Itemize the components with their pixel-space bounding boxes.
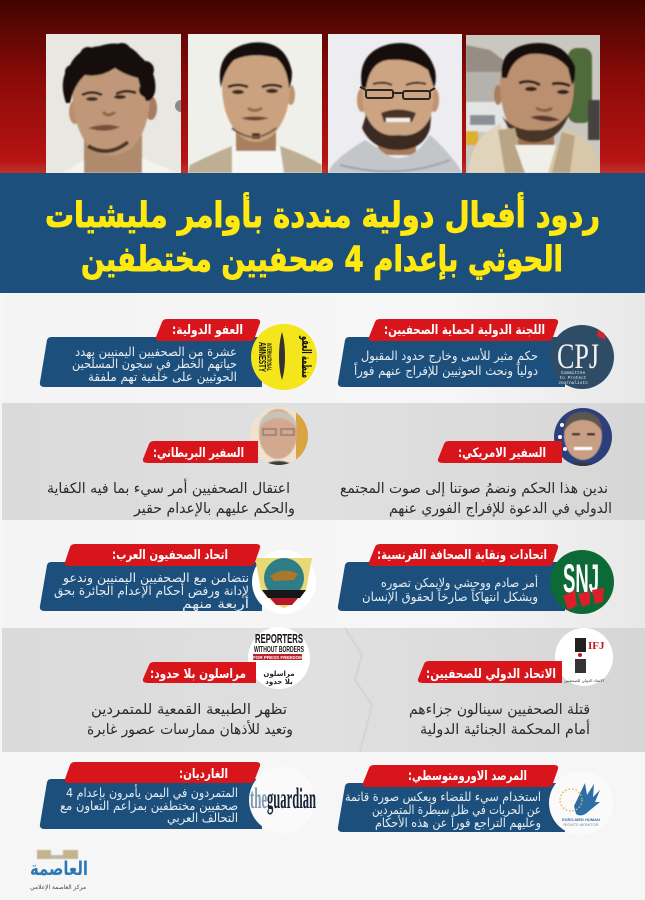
red header background bbox=[0, 0, 645, 175]
Guardian logo: the bbox=[250, 782, 267, 815]
RSF logo: REPORTERS bbox=[255, 631, 303, 646]
panel: The Guardian: الغارديان: bbox=[179, 767, 228, 782]
panel: US ambassador: السفير الامريكي: bbox=[458, 446, 546, 461]
panel: British ambassador: والحكم عليهم بالإعدام حقير bbox=[133, 501, 295, 517]
panel: CPJ bbox=[338, 319, 614, 389]
panel: CPJ: اللجنة الدولية لحماية الصحفيين: bbox=[384, 323, 545, 338]
Euro-Med logo bbox=[549, 771, 613, 835]
panel: US ambassador: الدولي في الدعوة للإفراج الفوري عنهم bbox=[389, 501, 612, 518]
title text bbox=[45, 192, 600, 280]
CPJ logo: to Protect bbox=[559, 375, 587, 381]
panel: Arab Journalists Union: نتضامن مع الصحفيين اليمنيين وندعو bbox=[62, 570, 249, 586]
panel: British ambassador: اعتقال الصحفيين أمر سيء بما فيه الكفاية bbox=[47, 478, 290, 497]
photo: journalist 2 bbox=[188, 34, 322, 173]
panel: French press unions: اتحادات ونقابة الصحافة الفرنسية: bbox=[377, 548, 547, 563]
panel: Arab Journalists Union: اتحاد الصحفيون العرب: bbox=[112, 548, 228, 563]
title text: الحوثي بإعدام 4 صحفيين مختطفين bbox=[81, 240, 563, 280]
RSF logo: FOR PRESS FREEDOM bbox=[253, 655, 303, 660]
panel: RSF: وتعيد للأذهان ممارسات عصور غابرة bbox=[87, 720, 293, 738]
RSF logo: WITHOUT BORDERS bbox=[254, 645, 304, 654]
IFJ logo: IFJ bbox=[588, 640, 605, 652]
photo: journalist 4 bbox=[466, 35, 600, 173]
panel: Arab Journalists Union bbox=[40, 544, 316, 614]
RSF logo: مراسلون bbox=[263, 670, 295, 678]
footer logo: مركز العاصمة الإعلامي bbox=[30, 884, 86, 891]
RSF logo bbox=[248, 627, 310, 689]
photo: journalist 1 bbox=[46, 34, 187, 173]
panel: Euro-Med monitor: استخدام سيء للقضاء ويعكس صورة قاتمة bbox=[345, 789, 541, 805]
panel: Amnesty: عشرة من الصحفيين اليمنيين يهدد bbox=[75, 344, 237, 360]
title banner bbox=[0, 173, 645, 293]
Euro-Med logo: RIGHTS MONITOR bbox=[563, 822, 599, 827]
panel: Amnesty bbox=[40, 319, 317, 390]
Amnesty logo bbox=[251, 324, 317, 390]
panel: French press unions bbox=[338, 544, 614, 614]
Amnesty logo: منظمة العفو bbox=[298, 335, 313, 378]
Arab journalists logo bbox=[252, 550, 316, 614]
panel: Euro-Med monitor: وعليهم التراجع فوراً عن هذه الأحكام bbox=[375, 813, 541, 831]
panel: IFJ: أمام المحكمة الجنائية الدولية bbox=[420, 719, 590, 738]
panel: British ambassador bbox=[47, 407, 308, 517]
CPJ logo: Journalists bbox=[558, 380, 588, 386]
panel: RSF bbox=[87, 627, 310, 738]
panel: IFJ: قتلة الصحفيين سينالون جزاءهم bbox=[409, 702, 590, 718]
IFJ logo: الاتحاد الدولي للصحفيين bbox=[564, 678, 604, 683]
panel: British ambassador: السفير البريطاني: bbox=[153, 446, 244, 461]
text: guardian bbox=[267, 782, 316, 815]
photo: journalist 3 bbox=[328, 34, 462, 173]
SNJ logo bbox=[550, 550, 614, 614]
footer logo bbox=[30, 850, 88, 891]
panel: Euro-Med monitor: المرصد الاورومتوسطي: bbox=[408, 769, 527, 784]
panel: Amnesty: حياتهم الخطر في سجون المسلحين bbox=[72, 356, 237, 372]
panel: US ambassador: ندين هذا الحكم ونضمُ صوتنا إلى صوت المجتمع bbox=[340, 481, 608, 497]
panel: French press unions: أمر صادم ووحشي ولايمكن تصوره bbox=[381, 574, 538, 591]
IFJ logo bbox=[555, 628, 613, 686]
Guardian logo bbox=[249, 767, 316, 833]
panel: The Guardian bbox=[40, 762, 316, 833]
panel: Euro-Med monitor bbox=[338, 765, 613, 835]
US ambassador portrait bbox=[554, 408, 612, 470]
Euro-Med logo: EURO-MED HUMAN bbox=[562, 817, 600, 822]
panel: Euro-Med monitor: عن الحريات في ظل سيطرة المتمردين bbox=[372, 802, 541, 818]
panel: Amnesty: العفو الدولية: bbox=[172, 323, 243, 338]
CPJ logo: Committee bbox=[561, 370, 585, 376]
panel: US ambassador bbox=[340, 408, 612, 518]
footer logo: العاصمة bbox=[30, 858, 88, 880]
panel: RSF: مراسلون بلا حدود: bbox=[150, 667, 246, 682]
panel: CPJ: حكم مثير للأسى وخارج حدود المقبول bbox=[361, 348, 538, 364]
panel: CPJ: دولياً ونحث الحوثيين للإفراج عنهم فوراً bbox=[354, 361, 538, 379]
CPJ logo: CPJ bbox=[557, 336, 599, 376]
panel: The Guardian: المتمردون في اليمن يأمرون بإعدام 4 bbox=[66, 784, 238, 801]
panel: The Guardian: صحفيين مختطفين بمزاعم التعاون مع bbox=[60, 798, 238, 814]
panel: Amnesty: الحوثيين على خلفية تهم ملفقة bbox=[88, 369, 237, 385]
panel: The Guardian: التحالف العربي bbox=[167, 810, 238, 826]
CPJ logo bbox=[550, 325, 614, 389]
panel: Arab Journalists Union: لإدانة ورفض أحكام الإعدام الجائرة بحق bbox=[54, 582, 249, 599]
panel: IFJ: الاتحاد الدولي للصحفيين: bbox=[426, 667, 556, 682]
panel: IFJ bbox=[409, 628, 613, 738]
RSF logo: بلا حدود bbox=[265, 678, 293, 686]
panel: Arab Journalists Union: أربعة منهم bbox=[182, 595, 249, 612]
UK ambassador portrait bbox=[250, 407, 308, 470]
panel: RSF: تظهر الطبيعة القمعية للمتمردين bbox=[91, 702, 287, 718]
panel: French press unions: ويشكل انتهاكاً صارخاً لحقوق الإنسان bbox=[362, 587, 538, 605]
Amnesty logo: AMNESTY bbox=[256, 342, 267, 372]
Amnesty logo: INTERNATIONAL bbox=[265, 343, 271, 371]
SNJ logo: SNJ bbox=[563, 557, 599, 601]
